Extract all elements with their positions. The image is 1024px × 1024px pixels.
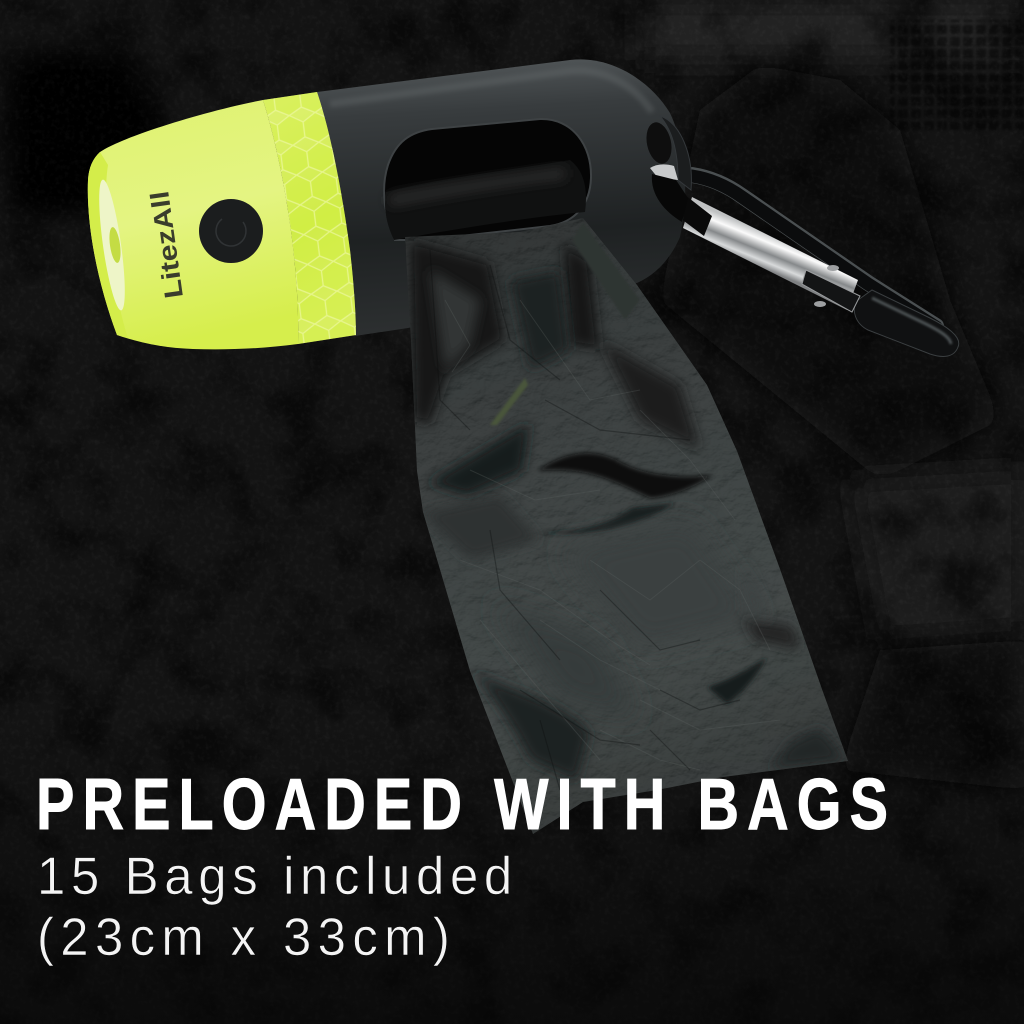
bag body: [405, 218, 848, 834]
gate rivets: [814, 265, 839, 307]
title: PRELOADED WITH BAGS: [36, 764, 888, 844]
front rim: [88, 152, 128, 338]
power button: [199, 199, 263, 263]
bag folds and wrinkles: [400, 215, 860, 845]
brand logo: LitezAll: [144, 189, 189, 300]
carabiner black spine: [692, 176, 936, 327]
carabiner clip: [672, 175, 959, 356]
yellow head: [88, 100, 298, 349]
subtitle line two: (23cm x 33cm): [37, 908, 450, 967]
carabiner black tip sleeve: [854, 290, 959, 356]
carabiner hole: [643, 120, 675, 166]
tip highlight: [872, 298, 951, 344]
bag window: [384, 119, 591, 240]
dispenser flashlight body: [88, 59, 691, 349]
gate clamp near tip: [802, 270, 860, 312]
bag hanging from the dispenser: [400, 215, 860, 845]
black housing: [317, 59, 685, 336]
gate clamp near body: [672, 188, 712, 236]
subtitle line one: 15 Bags included: [37, 847, 512, 906]
carabiner silver gate: [683, 197, 858, 310]
lens centre: [108, 226, 122, 264]
silver loop inside opening: [650, 164, 678, 180]
reflective band: [263, 92, 356, 344]
housing top sheen: [330, 71, 652, 112]
roll highlight: [388, 168, 566, 206]
strap loop: [660, 116, 691, 190]
lens: [94, 178, 130, 312]
attachment opening: [652, 174, 688, 222]
rolled bags in window: [385, 160, 586, 240]
spine rim light: [692, 175, 936, 326]
